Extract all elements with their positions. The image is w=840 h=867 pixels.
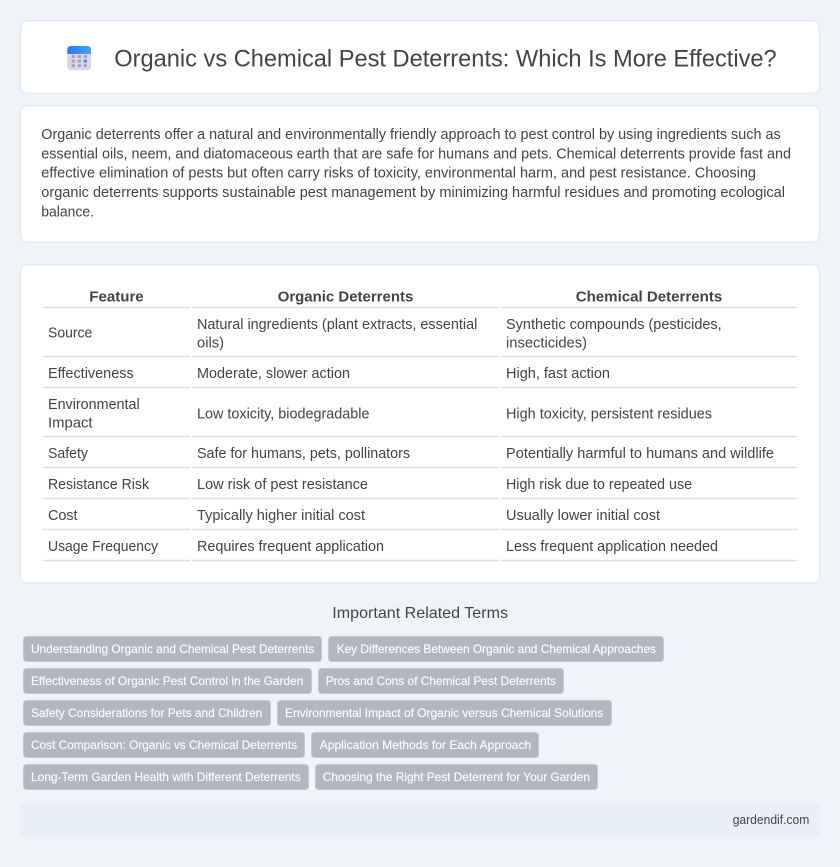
tag: Choosing the Right Pest Deterrent for Your Garden: [323, 770, 590, 784]
row: resistance risk: High risk due to repeated use: [506, 477, 692, 493]
row: environmental impact: Impact: [48, 415, 93, 431]
header panel: [21, 21, 819, 93]
related term tags: [24, 636, 664, 790]
tag: [318, 668, 564, 694]
tag: Environmental Impact of Organic versus Chemical Solutions: [285, 706, 603, 720]
row: cost: Cost: [48, 508, 78, 524]
tag: Effectiveness of Organic Pest Control in the Garden: [31, 674, 303, 688]
intro paragraph: balance.: [41, 204, 94, 220]
icon: calendar: [67, 46, 91, 70]
row: source: [43, 317, 797, 356]
row: effectiveness: [43, 366, 797, 388]
intro paragraph: effective elimination of pests but often carry risks of toxicity, environmental harm, and pest resistance. Choosing: [41, 166, 756, 182]
panel: introduction: [21, 106, 819, 242]
tag: Long-Term Garden Health with Different Deterrents: [31, 770, 301, 784]
title: Organic vs Chemical Pest Deterrents: Which Is More Effective?: [114, 46, 777, 73]
row: resistance risk: Low risk of pest resistance: [197, 477, 368, 493]
tag: Safety Considerations for Pets and Children: [31, 706, 262, 720]
tag: [24, 668, 312, 694]
tag: Pros and Cons of Chemical Pest Deterrents: [326, 674, 556, 688]
intro paragraph: [41, 127, 791, 220]
row: resistance risk: [43, 477, 797, 498]
row: usage frequency: Usage Frequency: [48, 539, 159, 555]
row: source: Source: [48, 326, 92, 342]
row: cost: Usually lower initial cost: [506, 508, 660, 524]
tag: Understanding Organic and Chemical Pest Deterrents: [31, 642, 314, 656]
row: cost: [43, 508, 797, 530]
footer bar: [20, 803, 820, 837]
tag: Key Differences Between Organic and Chemical Approaches: [337, 642, 656, 656]
tag: [24, 732, 304, 758]
tag: [24, 700, 270, 726]
tag: Cost Comparison: Organic vs Chemical Deterrents: [31, 738, 297, 752]
intro paragraph: essential oils, neem, and diatomaceous earth that are safe for humans and pets. Chemical deterrents provide fast and: [41, 146, 791, 162]
row: resistance risk: Resistance Risk: [48, 477, 150, 493]
row: safety: [43, 446, 797, 468]
tag: [312, 732, 538, 758]
row: environmental impact: Environmental: [48, 397, 140, 413]
table header row: [43, 289, 797, 308]
row: effectiveness: Moderate, slower action: [197, 366, 350, 382]
row: safety: Potentially harmful to humans and wildlife: [506, 446, 774, 462]
tag: [24, 764, 308, 790]
intro paragraph: organic deterrents supports sustainable pest management by minimizing harmful residues and promoting ecological: [41, 185, 785, 201]
row: environmental impact: High toxicity, persistent residues: [506, 406, 712, 422]
table header row: Chemical Deterrents: [576, 289, 722, 306]
row: cost: Typically higher initial cost: [197, 508, 365, 524]
row: source: Synthetic compounds (pesticides,: [506, 317, 722, 333]
row: usage frequency: [43, 539, 797, 560]
row: effectiveness: High, fast action: [506, 366, 610, 382]
row: environmental impact: Low toxicity, biodegradable: [197, 406, 370, 422]
tag: Application Methods for Each Approach: [320, 738, 531, 752]
panel: comparison table: [21, 265, 819, 583]
row: safety: Safe for humans, pets, pollinators: [197, 446, 410, 462]
tag: [278, 700, 612, 726]
footer source text: gardendif.com: [733, 813, 809, 827]
table header row: Feature: [89, 289, 144, 306]
row: usage frequency: Requires frequent application: [197, 539, 384, 555]
row: safety: Safety: [48, 446, 89, 462]
row: environmental impact: [43, 397, 797, 436]
row: effectiveness: Effectiveness: [48, 366, 134, 382]
row: usage frequency: Less frequent application needed: [506, 539, 718, 555]
table header row: Organic Deterrents: [278, 289, 413, 306]
row: source: oils): [197, 335, 224, 351]
intro paragraph: Organic deterrents offer a natural and environmentally friendly approach to pest control by using ingredients such as: [41, 127, 781, 143]
tag: [24, 636, 322, 662]
row: source: Natural ingredients (plant extracts, essential: [197, 317, 477, 333]
row: source: insecticides): [506, 335, 587, 351]
heading: important related terms: Important Related Terms: [332, 605, 508, 622]
tag: [316, 764, 598, 790]
tag: [328, 636, 664, 662]
